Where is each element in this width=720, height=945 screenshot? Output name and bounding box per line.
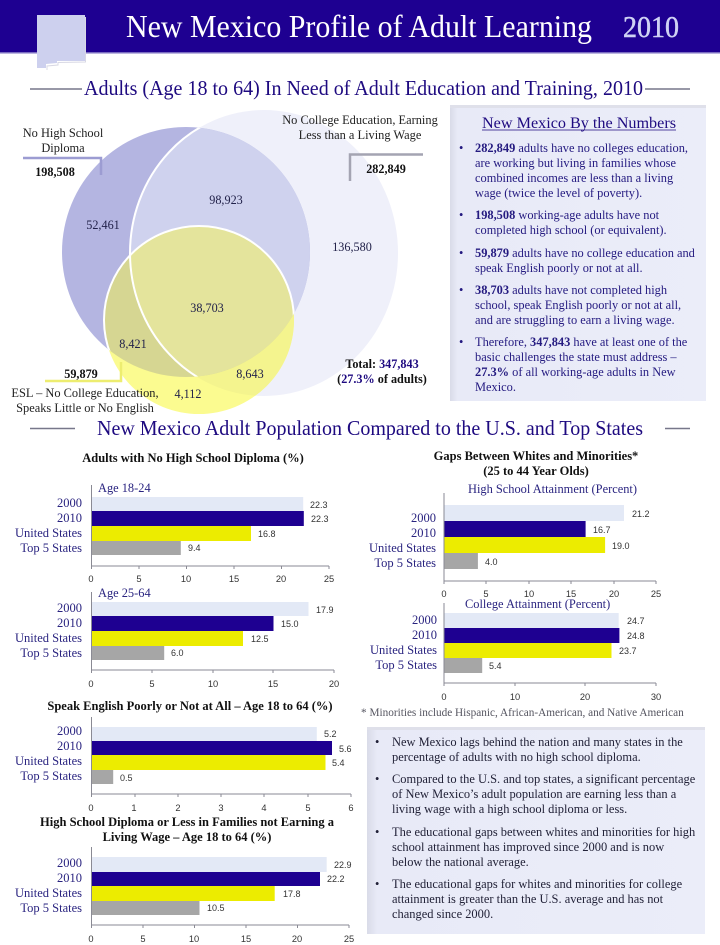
bullets: • (459, 208, 463, 222)
chart: age 18-24: 9.4 (188, 543, 201, 553)
chart: living wage: 15 (241, 934, 251, 944)
chart: age 25-64: 15.0 (281, 619, 299, 629)
chart: age 25-64: 0 (88, 679, 94, 689)
bullets: • (459, 246, 463, 260)
findings bullets: The educational gaps for whites and minorities for college (392, 877, 683, 891)
panel: by the numbers (450, 105, 706, 401)
chart: age 18-24: Top 5 States (20, 541, 82, 555)
chart: age 25-64: 17.9 (316, 605, 334, 615)
region values: 52,461 (86, 218, 120, 232)
findings bullets: Compared to the U.S. and top states, a significant percentage (392, 772, 696, 786)
bullets: 27.3% of all working-age adults in New (475, 365, 676, 379)
heading: gaps chart: (25 to 44 Year Olds) (483, 464, 589, 478)
chart: age 18-24: 22.3 (311, 514, 329, 524)
bullets: completed high school (or equivalent). (475, 223, 667, 237)
chart: high school attainment: Top 5 States (374, 556, 436, 570)
callout: no high school: 198,508 (35, 165, 75, 179)
chart: college attainment: 10 (510, 692, 520, 702)
chart: age 18-24: Age 18-24 (98, 481, 151, 495)
circle: ESL (104, 226, 294, 414)
panel: key findings (367, 727, 705, 934)
chart: age 18-24: United States (15, 526, 82, 540)
chart: age 18-24: 15 (229, 574, 239, 584)
chart: age 25-64: 6.0 (171, 648, 184, 658)
bullets: 282,849 adults have no colleges education, (475, 141, 688, 155)
region values: 38,703 (190, 301, 224, 315)
bullets: and are struggling to earn a living wage. (475, 313, 675, 327)
region values: 136,580 (332, 240, 372, 254)
chart: college attainment: 2010 (412, 628, 437, 642)
bullets: basic challenges the state must address – (475, 350, 677, 364)
callout: no high school: Diploma (41, 141, 85, 155)
heading: speak english chart: Speak English Poorly or Not at All – Age 18 to 64 (%) (47, 699, 333, 713)
heading: population compared: New Mexico Adult Population Compared to the U.S. and Top States (97, 416, 643, 440)
chart: speak english: 5.4 (332, 758, 345, 768)
icon: New Mexico state shape (37, 15, 86, 70)
chart: age 25-64: 15 (268, 679, 278, 689)
chart: living wage: 17.8 (283, 889, 301, 899)
chart: living wage (15, 847, 354, 944)
bullets: combined incomes are less than a living (475, 171, 673, 185)
callout: ESL (11, 362, 159, 415)
chart: college attainment (370, 597, 661, 702)
chart: high school attainment: 0 (441, 589, 447, 599)
findings bullets: percentage of adults with no high school diploma. (392, 750, 641, 764)
chart: living wage: 22.2 (327, 874, 345, 884)
callout: ESL: 59,879 (64, 367, 98, 381)
chart: living wage: 2000 (57, 856, 82, 870)
bullets: Mexico. (475, 380, 516, 394)
findings bullets: attainment is greater than the U.S. average and has not (392, 892, 664, 906)
chart: high school attainment: 21.2 (632, 509, 650, 519)
chart: age 25-64 (15, 586, 339, 689)
callout: no high school (23, 126, 104, 179)
chart: speak english: Top 5 States (20, 769, 82, 783)
chart: college attainment: 20 (580, 692, 590, 702)
chart: speak english: 2000 (57, 724, 82, 738)
chart: living wage: 0 (88, 934, 94, 944)
bullets: 198,508 working-age adults have not (475, 208, 660, 222)
chart: living wage: 5 (140, 934, 146, 944)
chart: college attainment: United States (370, 643, 437, 657)
chart: living wage: United States (15, 886, 82, 900)
bullets: • (459, 141, 463, 155)
findings bullets: school attainment has improved since 2000 and is now (392, 840, 664, 854)
chart: college attainment: 2000 (412, 613, 437, 627)
bullets: Therefore, 347,843 have at least one of the (475, 335, 688, 349)
chart: speak english: 3 (218, 803, 224, 813)
chart: speak english: 0.5 (120, 773, 133, 783)
findings bullets: • (375, 877, 379, 891)
region values: 98,923 (209, 193, 243, 207)
chart: living wage: 10.5 (207, 903, 225, 913)
chart: age 25-64: Top 5 States (20, 646, 82, 660)
chart: speak english: 2010 (57, 739, 82, 753)
header banner (0, 0, 720, 54)
region values: 8,421 (119, 337, 147, 351)
chart: living wage: Top 5 States (20, 901, 82, 915)
chart: age 18-24: 16.8 (258, 529, 276, 539)
chart: high school attainment: 2010 (411, 526, 436, 540)
chart: speak english: 6 (348, 803, 354, 813)
chart: high school attainment: 15 (566, 589, 576, 599)
chart: age 18-24 (15, 481, 334, 584)
findings bullets: The educational gaps between whites and minorities for high (392, 825, 696, 839)
chart: speak english: 1 (131, 803, 137, 813)
chart: college attainment: 23.7 (619, 646, 637, 656)
bullets (459, 141, 696, 394)
chart: age 25-64: 2000 (57, 601, 82, 615)
chart: speak english (15, 717, 354, 813)
heading: living wage chart: Living Wage – Age 18 to 64 (%) (103, 830, 271, 844)
heading: gaps chart (434, 449, 638, 478)
chart: age 25-64: 20 (329, 679, 339, 689)
chart: age 25-64: 10 (208, 679, 218, 689)
year: 2010 (623, 9, 679, 44)
bullets: school, speak English poorly or not at all, (475, 298, 681, 312)
bullets: • (459, 335, 463, 349)
chart: speak english: 5.2 (324, 729, 337, 739)
bullets: speak English poorly or not at all. (475, 261, 643, 275)
callout: no high school: No High School (23, 126, 104, 140)
chart: high school attainment: 25 (651, 589, 661, 599)
bullets: • (459, 283, 463, 297)
findings bullets: New Mexico lags behind the nation and many states in the (392, 735, 683, 749)
chart: age 18-24: 10 (181, 574, 191, 584)
chart: age 18-24: 22.3 (310, 500, 328, 510)
chart: high school attainment: 16.7 (593, 525, 611, 535)
chart: speak english: United States (15, 754, 82, 768)
chart: high school attainment: 10 (524, 589, 534, 599)
chart: speak english: 4 (261, 803, 267, 813)
bullets: 59,879 adults have no college education and (475, 246, 696, 260)
callout: no college earning (282, 113, 438, 181)
chart: age 18-24: 2000 (57, 496, 82, 510)
findings bullets: below the national average. (392, 855, 529, 869)
total: (27.3% of adults) (337, 372, 427, 386)
callout: ESL: Speaks Little or No English (16, 401, 155, 415)
chart: college attainment: Top 5 States (375, 658, 437, 672)
chart: age 18-24: 5 (136, 574, 142, 584)
chart: college attainment: 30 (651, 692, 661, 702)
total (337, 357, 427, 386)
chart: high school attainment: High School Attainment (Percent) (468, 482, 637, 496)
chart: speak english: 5 (305, 803, 311, 813)
chart: age 18-24: 0 (88, 574, 94, 584)
total: Total: 347,843 (345, 357, 419, 371)
callout: no college earning: No College Education, Earning (282, 113, 438, 127)
chart: age 25-64: United States (15, 631, 82, 645)
chart: age 18-24: 20 (276, 574, 286, 584)
chart: high school attainment (369, 482, 661, 599)
chart: high school attainment: 19.0 (612, 541, 630, 551)
findings bullets: • (375, 772, 379, 786)
findings bullets: • (375, 825, 379, 839)
chart: age 25-64: 5 (149, 679, 155, 689)
chart: age 18-24: 2010 (57, 511, 82, 525)
bullets: 38,703 adults have not completed high (475, 283, 668, 297)
chart: age 25-64: 12.5 (251, 634, 269, 644)
chart: college attainment: College Attainment (Percent) (465, 597, 610, 611)
chart: high school attainment: United States (369, 541, 436, 555)
chart: college attainment: 0 (441, 692, 447, 702)
callout: no college earning: Less than a Living Wage (299, 128, 422, 142)
chart: high school attainment: 5 (483, 589, 489, 599)
chart: college attainment: 24.7 (627, 616, 645, 626)
findings bullets: changed since 2000. (392, 907, 493, 921)
heading: no high school diploma chart: Adults with No High School Diploma (%) (82, 451, 304, 465)
region values: 4,112 (175, 387, 201, 401)
chart: living wage: 22.9 (334, 860, 352, 870)
region values: 8,643 (236, 367, 264, 381)
chart: high school attainment: 20 (609, 589, 619, 599)
chart: speak english: 2 (175, 803, 181, 813)
title: New Mexico Profile of Adult Learning (126, 8, 592, 44)
findings bullets: of New Mexico’s adult population are earning less than a (392, 787, 677, 801)
circle: no high school diploma (62, 127, 310, 377)
chart: college attainment: 5.4 (489, 661, 502, 671)
findings bullets: living wage with a high school diploma or less. (392, 802, 627, 816)
region values (86, 193, 372, 401)
footnote: * Minorities include Hispanic, African-American, and Native American (361, 707, 684, 719)
callout: ESL: ESL – No College Education, (11, 386, 159, 400)
chart: living wage: 20 (292, 934, 302, 944)
chart: age 18-24: 25 (324, 574, 334, 584)
chart: high school attainment: 2000 (411, 511, 436, 525)
findings bullets (375, 735, 696, 921)
chart: speak english: 0 (88, 803, 94, 813)
chart: speak english: 5.6 (339, 744, 352, 754)
bullets: are working but living in families whose (475, 156, 676, 170)
panel heading: New Mexico By the Numbers (482, 115, 676, 132)
circle: no college, living wage (130, 110, 398, 396)
chart: age 25-64: Age 25-64 (98, 586, 151, 600)
findings bullets: • (375, 735, 379, 749)
venn diagram (62, 110, 398, 414)
heading: adults in need: Adults (Age 18 to 64) In Need of Adult Education and Training, 2010 (84, 76, 643, 100)
chart: high school attainment: 4.0 (485, 557, 498, 567)
chart: living wage: 2010 (57, 871, 82, 885)
bullets: wage (twice the level of poverty). (475, 186, 642, 200)
chart: living wage: 25 (344, 934, 354, 944)
heading: living wage chart: High School Diploma or Less in Families not Earning a (40, 815, 335, 829)
chart: living wage: 10 (189, 934, 199, 944)
heading: living wage chart (40, 815, 335, 844)
chart: college attainment: 24.8 (627, 631, 645, 641)
heading: gaps chart: Gaps Between Whites and Minorities* (434, 449, 638, 463)
callout: no college earning: 282,849 (366, 162, 406, 176)
chart: age 25-64: 2010 (57, 616, 82, 630)
